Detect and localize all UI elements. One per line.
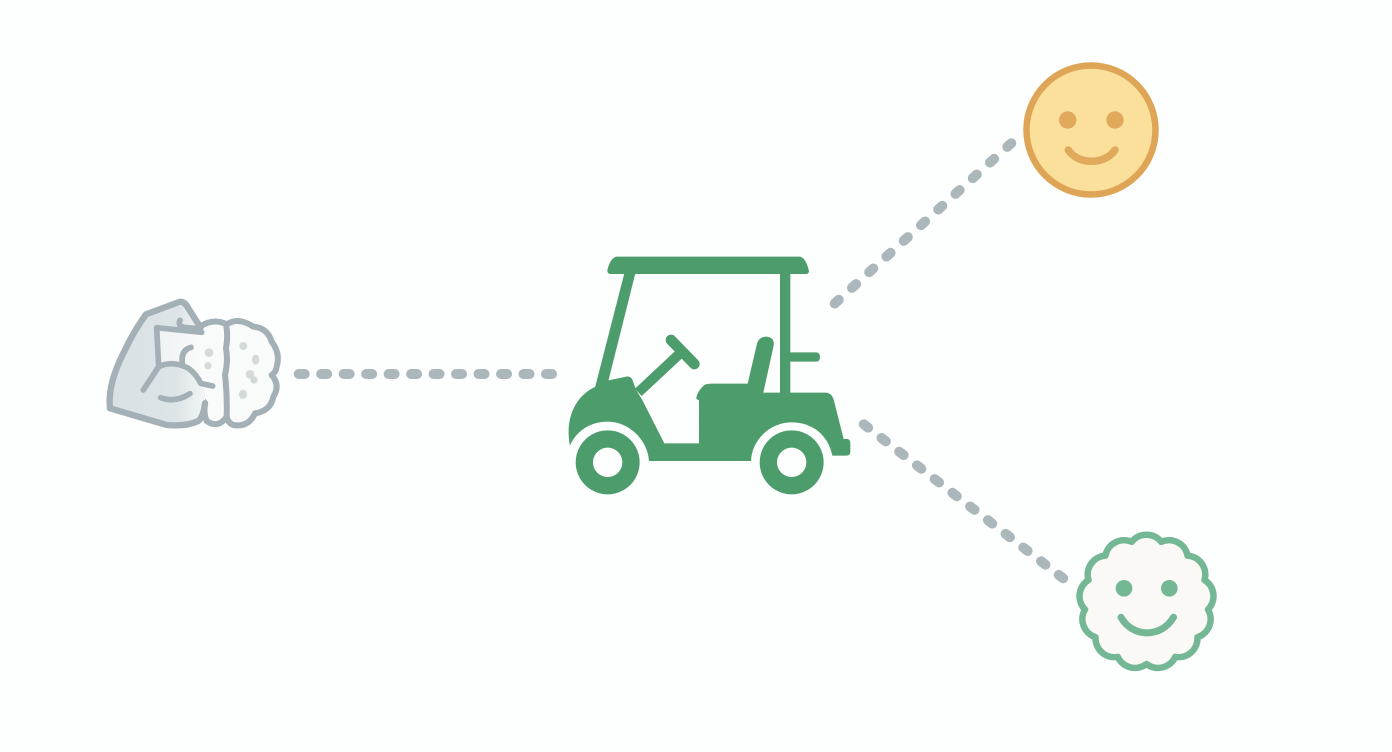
dashed connector: cart to yellow smiley xyxy=(835,143,1011,304)
green face smile xyxy=(1121,617,1174,633)
arm inner pale area xyxy=(158,328,205,385)
icon: golf cart xyxy=(569,257,850,494)
foam divider line xyxy=(225,324,227,417)
yellow face smile xyxy=(1068,150,1115,161)
dashed connector: cart to green scalloped smiley xyxy=(864,424,1063,578)
arm inner contour lines xyxy=(143,320,213,400)
scalloped badge xyxy=(1080,535,1213,668)
icon: green scalloped smiley face xyxy=(1080,535,1213,668)
muscle foam cloud xyxy=(190,321,278,425)
cart body and seat xyxy=(569,337,850,461)
cart front wheel xyxy=(576,430,640,494)
cart rear wheel xyxy=(760,430,824,494)
arm silhouette xyxy=(110,302,205,425)
cart front pillar xyxy=(595,273,635,388)
icon: yellow smiley face xyxy=(1026,66,1156,194)
foam dots xyxy=(204,342,259,399)
cart roof xyxy=(607,257,809,274)
cart steering column and wheel xyxy=(638,340,694,392)
yellow face disc xyxy=(1026,66,1156,194)
icon: flexed muscle arm with foam texture xyxy=(110,302,278,425)
yellow face eyes xyxy=(1059,111,1124,129)
dashed connector: cart to muscle icon xyxy=(299,369,552,379)
cart rear pillar and rack xyxy=(780,273,820,395)
green face eyes xyxy=(1116,580,1178,597)
arm outer outline xyxy=(110,302,205,425)
